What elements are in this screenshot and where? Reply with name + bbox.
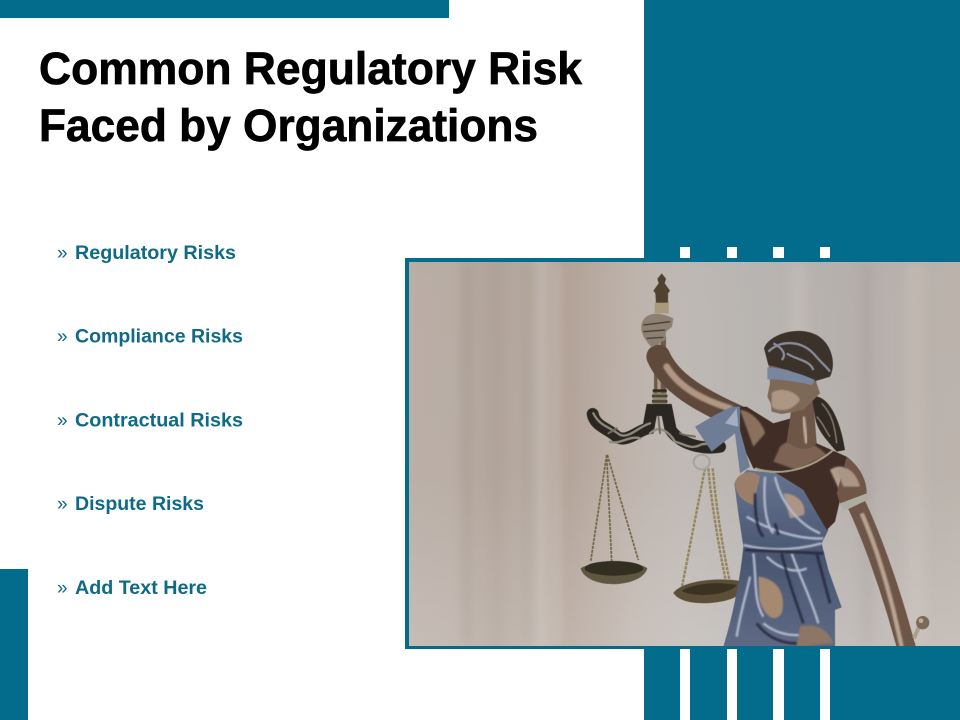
list item: add text here: » [57, 578, 68, 599]
face [767, 363, 820, 414]
raised arm [658, 357, 737, 417]
left scale chains and pan [591, 455, 638, 562]
list item: dispute risks: » [57, 494, 68, 515]
white stripes below photo [680, 649, 830, 720]
bottom-left accent bar [0, 569, 28, 720]
list item: compliance risks: » [57, 326, 68, 348]
sword hilt [914, 626, 919, 638]
scale beam [593, 410, 720, 448]
list item: compliance risks: Compliance Risks [75, 326, 243, 348]
top accent bar [0, 0, 449, 18]
extended arm [857, 505, 907, 648]
staff [653, 273, 670, 313]
neck [787, 400, 817, 449]
list item: regulatory risks: Regulatory Risks [75, 242, 236, 264]
list item: add text here: Add Text Here [75, 577, 207, 599]
hair [764, 331, 833, 382]
title: Common Regulatory Risk [39, 43, 583, 94]
risk list [57, 242, 243, 599]
dress folds [737, 477, 823, 637]
list item: contractual risks: » [57, 410, 68, 432]
torso [740, 406, 847, 530]
white squares above photo [680, 247, 830, 258]
right teal panel [644, 0, 960, 720]
list item: contractual risks: Contractual Risks [75, 410, 243, 432]
blindfold [767, 367, 815, 385]
photo: statue of justice with frame [405, 258, 960, 649]
right scale chains and pan [682, 468, 732, 590]
hand [641, 314, 673, 347]
skirt and dress [723, 470, 842, 647]
list item: regulatory risks: » [57, 243, 68, 264]
back hair [812, 396, 845, 452]
title [39, 43, 583, 151]
list item: dispute risks: Dispute Risks [75, 493, 204, 515]
title: Faced by Organizations [39, 100, 538, 151]
